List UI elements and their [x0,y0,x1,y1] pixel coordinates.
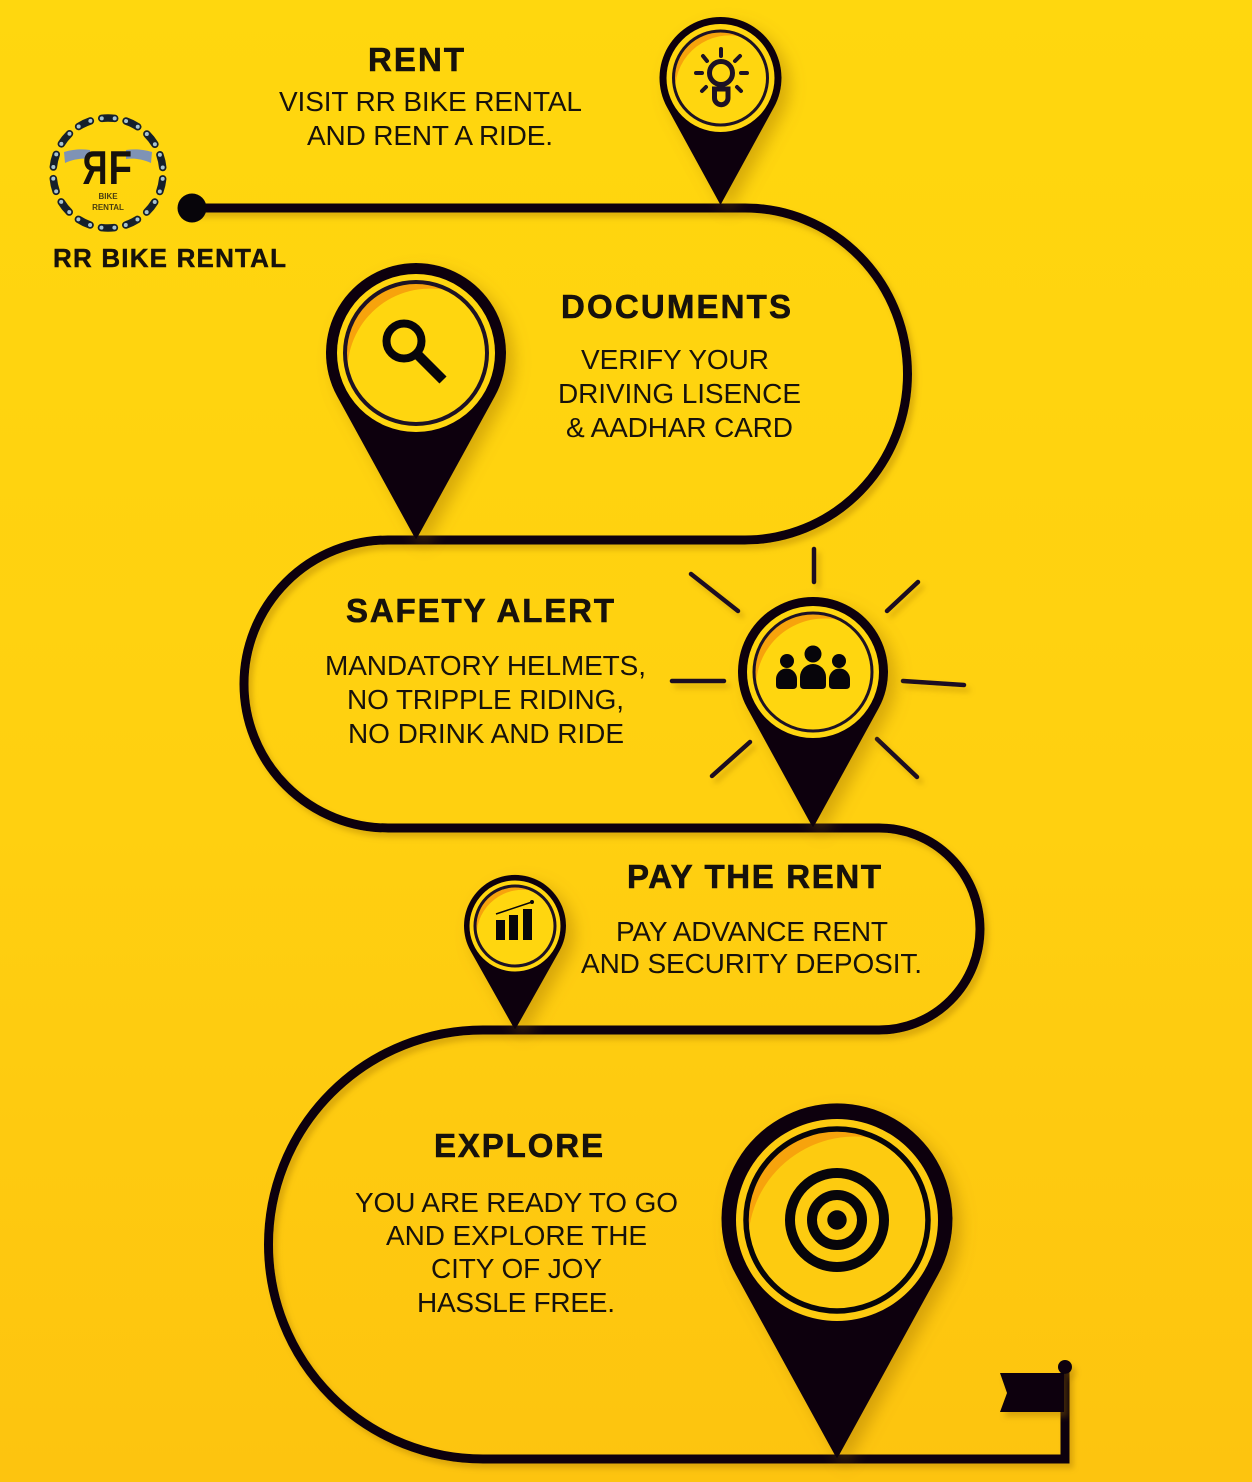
step 5 text: CITY OF JOY [431,1253,602,1284]
step 1 heading: RENT [368,41,464,78]
step 2 text: & AADHAR CARD [566,412,793,443]
step 2 heading: DOCUMENTS [561,288,791,325]
step 5 heading: EXPLORE [434,1127,603,1164]
step 2 text [558,344,801,443]
step 3 text: NO TRIPPLE RIDING, [347,684,624,715]
sun rays around pin 3 [672,549,964,777]
step 3 heading: SAFETY ALERT [346,592,614,629]
logo: RR Bike Rental chain badge [47,112,169,234]
winding road path [178,194,1065,1459]
step 1 text: AND RENT A RIDE. [307,120,553,151]
step 2 text: VERIFY YOUR [581,344,769,375]
icon: three people [776,646,850,689]
step 5 text: YOU ARE READY TO GO [355,1187,678,1218]
icon: rising bars [496,900,534,940]
step 3 text: MANDATORY HELMETS, [325,650,646,681]
step 5 text [355,1187,678,1318]
pin 5: target [721,1103,953,1459]
icon: light bulb [696,49,747,105]
step 4 text: AND SECURITY DEPOSIT. [581,948,922,979]
logo: RR Bike Rental chain badge: R [82,142,108,194]
icon: target [790,1173,884,1267]
step 1 text [279,86,582,151]
step 5 text: AND EXPLORE THE [386,1220,647,1251]
logo: RR Bike Rental chain badge: F [108,142,132,195]
step 5 text: HASSLE FREE. [417,1287,615,1318]
step 3 text: NO DRINK AND RIDE [348,718,624,749]
pin 1: light bulb [660,17,781,205]
finish flag [1000,1360,1072,1412]
icon: magnifier [386,324,443,380]
step 4 text [581,916,922,979]
step 2 text: DRIVING LISENCE [558,378,801,409]
pin 4: bar chart [464,875,566,1030]
step 3 text [325,650,646,749]
pin 3: people [738,597,888,828]
step 4 text: PAY ADVANCE RENT [616,916,888,947]
logo: RR Bike Rental chain badge: RENTAL [92,203,124,212]
logo: RR Bike Rental chain badge: BIKE [98,192,118,201]
step 1 text: VISIT RR BIKE RENTAL [279,86,582,117]
brand name: RR BIKE RENTAL [53,243,286,273]
step 4 heading: PAY THE RENT [627,858,881,895]
pin 2: magnifier [326,263,506,540]
